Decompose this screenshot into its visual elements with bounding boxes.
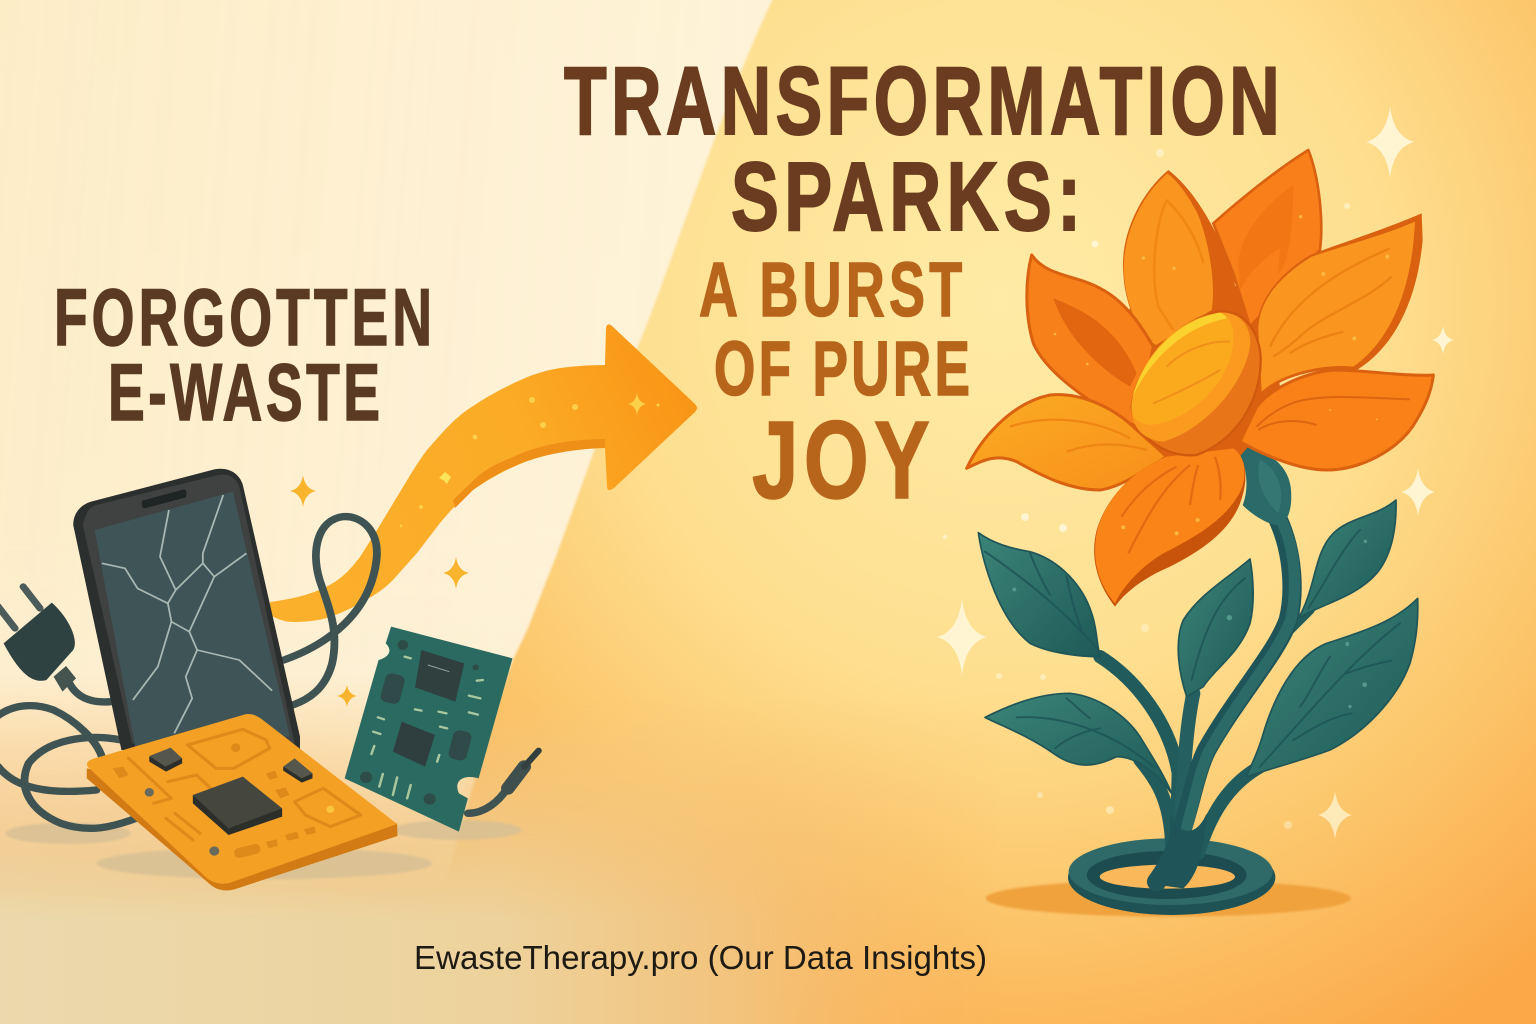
ground shadow	[986, 880, 1351, 917]
bottom petal	[1094, 448, 1245, 607]
chips	[193, 795, 282, 835]
left upper petal	[1027, 255, 1153, 427]
screen cracks	[102, 495, 272, 733]
icon: broken phone	[73, 469, 300, 750]
right lower petal	[1240, 370, 1433, 470]
ring base	[1068, 838, 1275, 915]
title: transformation sparks: SPARKS:	[731, 144, 1081, 252]
heading: forgotten e-waste: FORGOTTEN	[54, 271, 432, 363]
petal speckles	[1054, 215, 1389, 535]
top left petal	[1123, 170, 1235, 347]
icon: green circuit board	[345, 627, 539, 832]
ground shadows	[5, 820, 521, 879]
title: transformation sparks: TRANSFORMATION	[564, 46, 1280, 155]
sparkles: left gold	[290, 475, 469, 707]
stems	[1100, 520, 1310, 888]
heading: forgotten e-waste	[54, 271, 432, 438]
arrow	[270, 324, 697, 622]
title: transformation sparks	[564, 46, 1280, 252]
right upper petal	[1257, 213, 1423, 397]
plant	[978, 445, 1418, 917]
e-waste pile	[0, 469, 539, 890]
leaf veins	[985, 530, 1400, 767]
sparkles: right cream	[937, 106, 1454, 839]
left lower petal	[967, 395, 1167, 490]
subtitle: a burst of pure joy: OF PURE	[714, 326, 970, 412]
icon: orange circuit board	[87, 714, 397, 890]
connector	[508, 751, 539, 788]
subtitle: a burst of pure joy: A BURST	[699, 248, 962, 333]
flower	[967, 150, 1433, 607]
subtitle: a burst of pure joy	[699, 248, 970, 522]
back right petal	[1213, 150, 1321, 327]
cables	[0, 517, 507, 828]
under blob	[1117, 273, 1283, 463]
heading: forgotten e-waste: E-WASTE	[108, 346, 380, 438]
icon: plug	[0, 587, 76, 692]
bud	[1233, 445, 1291, 525]
footer credit: EwasteTherapy.pro (Our Data Insights)	[414, 939, 987, 976]
leaves	[978, 500, 1418, 793]
flower centre	[1132, 311, 1261, 455]
subtitle: a burst of pure joy: JOY	[752, 399, 930, 522]
